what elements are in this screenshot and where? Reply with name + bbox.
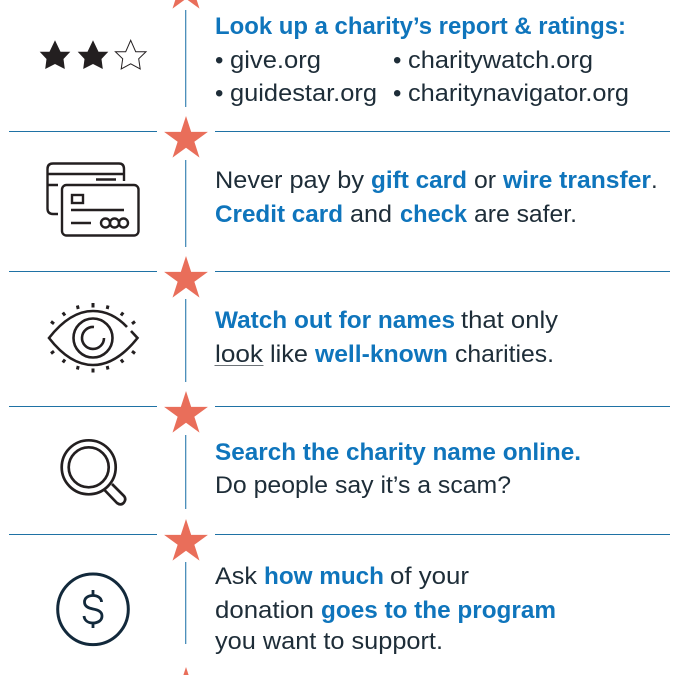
text: ask how much: you want to support. — [215, 628, 443, 655]
text: payment advice: and — [350, 201, 392, 228]
text: watch out for names: charities. — [455, 341, 554, 368]
text: payment advice: gift card — [371, 167, 467, 194]
text: payment advice: or — [474, 167, 496, 194]
text: payment advice — [215, 167, 658, 228]
icon: star rating — [40, 40, 146, 69]
text: watch out for names — [214, 307, 558, 368]
text: ask how much: how much — [264, 563, 384, 590]
text: look up ratings — [215, 13, 629, 107]
text: ask how much: of your — [390, 563, 469, 590]
text: search online: Do people say it’s a scam? — [215, 472, 511, 499]
icon: eye — [49, 303, 138, 372]
text: payment advice: Credit card — [215, 201, 343, 228]
text: look up ratings: charitywatch.org — [408, 47, 593, 74]
text: look up ratings: Look up a charity’s report & ratings: — [215, 13, 626, 40]
star marker 5 — [164, 519, 208, 561]
text: look up ratings: • — [393, 47, 401, 74]
text: payment advice: . — [651, 167, 658, 194]
text: look up ratings: charitynavigator.org — [408, 80, 629, 107]
text: payment advice: check — [400, 201, 468, 228]
text: payment advice: wire transfer — [502, 167, 651, 194]
icon: magnifying glass — [62, 440, 125, 504]
text: look up ratings: give.org — [230, 47, 321, 74]
star marker 6 — [183, 667, 189, 675]
text: watch out for names: that only — [461, 307, 558, 334]
text: look up ratings: guidestar.org — [230, 80, 377, 107]
text: look up ratings: • — [215, 47, 223, 74]
text: payment advice: Never pay by — [215, 167, 364, 194]
star marker 2 — [164, 116, 208, 158]
star marker 1 — [172, 0, 200, 9]
text: watch out for names: look — [215, 341, 264, 368]
icon: dollar coin — [58, 574, 128, 645]
text: watch out for names: well-known — [314, 341, 448, 368]
text: search online: Search the charity name online. — [215, 439, 581, 466]
text: watch out for names: Watch out for names — [215, 307, 455, 334]
text: payment advice: are safer. — [474, 201, 577, 228]
text: look up ratings: • — [393, 80, 401, 107]
text: ask how much: Ask — [215, 563, 258, 590]
text: search online — [215, 439, 581, 499]
text: ask how much: goes to the program — [321, 597, 556, 624]
star marker 4 — [164, 391, 208, 433]
icon: credit cards — [48, 164, 138, 236]
text: ask how much — [215, 563, 556, 655]
text: look up ratings: • — [215, 80, 223, 107]
text: watch out for names: like — [270, 341, 308, 368]
text: ask how much: donation — [215, 597, 314, 624]
star marker 3 — [164, 256, 208, 298]
